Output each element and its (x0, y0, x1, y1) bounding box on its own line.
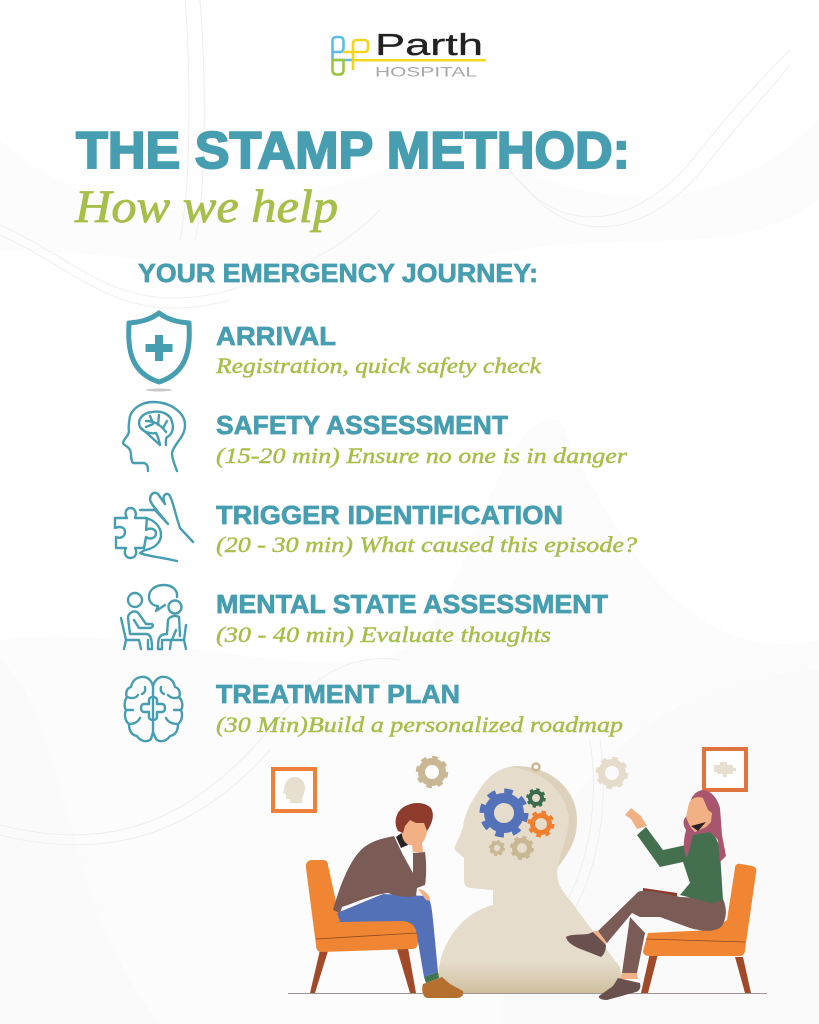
step 1: arrival (129, 313, 542, 392)
step 1 heading: ARRIVAL (216, 321, 336, 351)
step 3 description: (20 - 30 min) What caused this episode? (216, 532, 638, 557)
floating tan gear (418, 758, 446, 786)
tan gear large in head (512, 838, 532, 858)
step 2 description: (15-20 min) Ensure no one is in danger (216, 443, 627, 468)
step 5 heading: TREATMENT PLAN (216, 679, 460, 709)
dark green gear (528, 790, 544, 806)
icon: two people talking (121, 585, 186, 649)
blue gear (482, 792, 526, 834)
orange gear (529, 812, 553, 836)
illustration: therapy session (273, 749, 767, 1000)
framed puzzle picture (704, 749, 746, 790)
central bust silhouette (438, 766, 621, 993)
step 4: mental state assessment (121, 585, 608, 649)
title: THE STAMP METHOD: (76, 122, 630, 180)
logo: Parth Hospital: HOSPITAL (375, 64, 477, 80)
step 4 heading: MENTAL STATE ASSESSMENT (216, 589, 608, 619)
step 5 description: (30 Min)Build a personalized roadmap (216, 712, 623, 737)
tan gear on top of head (532, 764, 540, 770)
woman in orange chair (566, 790, 756, 1000)
step 3: trigger identification (115, 493, 638, 561)
section heading: YOUR EMERGENCY JOURNEY: (138, 258, 538, 288)
framed head picture (273, 769, 315, 811)
ground line (288, 993, 767, 994)
step 2 heading: SAFETY ASSESSMENT (216, 410, 508, 440)
tan gear small in head (490, 841, 504, 855)
man in orange chair (306, 803, 463, 998)
step 4 description: (30 - 40 min) Evaluate thoughts (216, 622, 551, 647)
step 3 heading: TRIGGER IDENTIFICATION (216, 500, 563, 530)
logo: Parth Hospital: Parth (375, 27, 483, 62)
icon: brain with medical cross (125, 677, 182, 741)
icon: head with brain (123, 402, 185, 471)
icon: shield with cross (129, 313, 189, 392)
subtitle: How we help (74, 181, 338, 233)
step 5: treatment plan (125, 677, 623, 741)
logo: Parth Hospital (332, 27, 486, 80)
icon: hand placing puzzle piece (115, 493, 193, 561)
step 1 description: Registration, quick safety check (215, 353, 542, 378)
step 2: safety assessment (123, 402, 627, 471)
floating cream gear (598, 759, 626, 787)
